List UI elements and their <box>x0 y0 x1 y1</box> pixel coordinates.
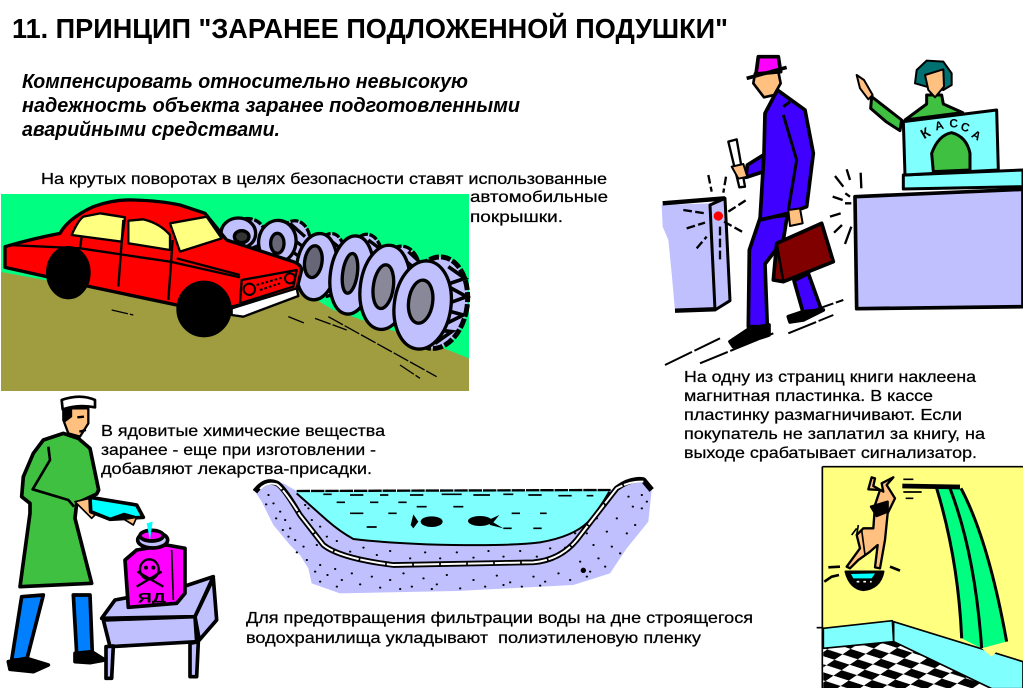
text block: poison additives <box>101 423 385 478</box>
cashier <box>830 61 1023 309</box>
text block: poison additives: заранее - еще при изготовлении - <box>101 442 376 459</box>
KASSA sign <box>917 116 984 144</box>
text block: polyethylene film: водохранилища укладывают полиэтиленовую пленку <box>246 630 701 647</box>
diver <box>824 477 900 590</box>
springboard <box>902 486 960 487</box>
illustration: chemist adding antidote to poison: ЯД <box>138 590 166 606</box>
text block: tyres on bends: покрышки. <box>470 209 563 226</box>
KASSA sign: С <box>959 119 972 135</box>
text block: magnetic strip: На одну из страниц книги наклеена <box>684 369 976 386</box>
floor <box>823 642 992 688</box>
car <box>5 200 302 336</box>
illustration: chemist adding antidote to poison <box>8 397 217 678</box>
tyres <box>221 216 473 353</box>
text block: tyres on bends: автомобильные <box>470 189 608 206</box>
soil speckles <box>266 495 647 589</box>
text block: magnetic strip: покупатель не заплатил за книгу, на <box>684 426 985 443</box>
skull <box>140 559 159 579</box>
principle statement: Компенсировать относительно невысокую <box>22 70 468 93</box>
title: 11. ПРИНЦИП "ЗАРАНЕЕ ПОДЛОЖЕННОЙ ПОДУШКИ" <box>12 13 728 44</box>
KASSA sign: А <box>933 118 945 134</box>
KASSA sign: С <box>949 116 958 130</box>
illustration: car and tyres <box>1 194 473 391</box>
gate <box>662 175 747 311</box>
shopper <box>728 57 833 347</box>
text block: poison additives: В ядовитые химические вещества <box>101 423 385 440</box>
text block: tyres on bends <box>41 171 608 226</box>
KASSA sign: А <box>969 127 984 144</box>
canister <box>125 545 185 607</box>
text block: polyethylene film <box>246 610 753 647</box>
text block: magnetic strip: пластинку размагничивают. Если <box>684 407 962 424</box>
chute <box>937 488 1007 648</box>
text block: magnetic strip <box>684 369 985 462</box>
text block: polyethylene film: Для предотвращения фильтрации воды на дне строящегося <box>246 610 753 627</box>
fish <box>411 514 503 528</box>
film <box>255 480 652 565</box>
illustration: shopper, anti-theft gate and cashier <box>662 57 1023 365</box>
road skid marks <box>112 310 437 378</box>
KASSA sign: К <box>917 124 933 142</box>
text block: poison additives: добавляют лекарства-присадки. <box>101 461 372 478</box>
text block: tyres on bends: На крутых поворотах в целях безопасности ставят использованные <box>41 171 607 188</box>
table <box>102 577 213 618</box>
text block: magnetic strip: выходе срабатывает сигнализатор. <box>684 445 977 462</box>
principle statement: аварийными средствами. <box>22 118 280 141</box>
skirting board <box>823 621 894 648</box>
text block: magnetic strip: магнитная пластинка. В кассе <box>684 388 933 405</box>
illustration: reservoir with polyethylene film <box>255 480 652 593</box>
illustration: diver aiming for a basin <box>817 467 1023 688</box>
principle statement <box>22 70 520 141</box>
floor lines <box>665 300 843 365</box>
principle statement: надежность объекта заранее подготовленными <box>22 94 520 117</box>
